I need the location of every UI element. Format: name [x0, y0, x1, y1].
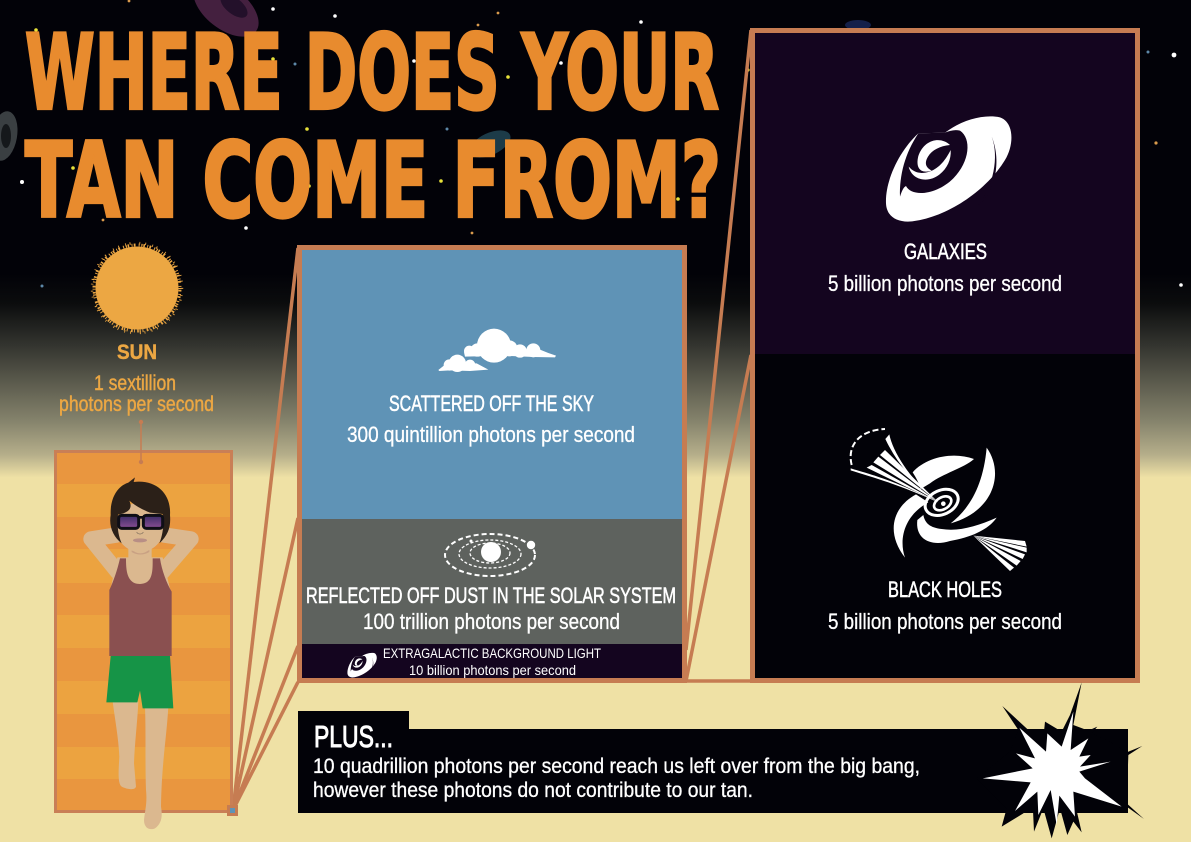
icon: clouds	[438, 329, 556, 372]
icon: black hole	[851, 429, 1027, 571]
connector lines: first panel to second panel	[686, 30, 751, 681]
icon: solar system	[445, 534, 535, 576]
panel: first zoom (sky, solar system, extragalactic)	[299, 247, 685, 680]
panel: galaxies	[752, 30, 1138, 354]
callout heading: PLUS...	[314, 719, 393, 754]
sun label: SUN	[117, 341, 157, 364]
icon: sun	[92, 243, 182, 333]
panel: scattered off the sky	[299, 247, 685, 519]
callout text	[313, 755, 920, 802]
connector lines: towel corner to first panel	[233, 248, 298, 810]
panel: reflected off dust in the solar system	[299, 519, 685, 644]
black holes heading and value	[828, 577, 1062, 634]
solar system heading and value: 100 trillion photons per second	[363, 609, 620, 634]
icon: galaxy	[886, 116, 1011, 222]
black holes heading and value: BLACK HOLES	[888, 577, 1002, 602]
title: TAN COME FROM?	[25, 122, 721, 242]
sky heading and value: SCATTERED OFF THE SKY	[389, 391, 594, 416]
panel: second zoom (galaxies and black holes)	[752, 30, 1138, 680]
extragalactic heading and value	[383, 645, 601, 678]
callout text: however these photons do not contribute to our tan.	[313, 779, 753, 802]
faint background galaxies	[0, 0, 871, 163]
panel: extragalactic background light	[299, 644, 685, 678]
galaxies heading and value: 5 billion photons per second	[828, 271, 1062, 296]
extragalactic heading and value: 10 billion photons per second	[409, 662, 576, 678]
extragalactic heading and value: EXTRAGALACTIC BACKGROUND LIGHT	[383, 645, 601, 661]
black holes heading and value: 5 billion photons per second	[828, 609, 1062, 634]
background stars	[20, 0, 1183, 287]
solar system heading and value: REFLECTED OFF DUST IN THE SOLAR SYSTEM	[306, 583, 676, 608]
icon: big bang burst	[977, 682, 1144, 838]
towel	[54, 450, 238, 816]
title: WHERE DOES YOUR	[25, 14, 719, 134]
galaxies heading and value	[828, 239, 1062, 296]
pointer from sun to person	[139, 420, 143, 464]
sky heading and value	[347, 391, 635, 447]
panel: plus big bang callout	[298, 682, 1144, 838]
galaxies heading and value: GALAXIES	[904, 239, 987, 264]
sun label: 1 sextillion	[94, 372, 176, 395]
sun label	[59, 341, 214, 416]
callout text: 10 quadrillion photons per second reach us left over from the big bang,	[313, 755, 920, 778]
solar system heading and value	[306, 583, 676, 634]
icon: small galaxy	[347, 653, 377, 677]
panel: black holes	[752, 354, 1138, 680]
person sunbathing	[91, 477, 191, 829]
title	[25, 14, 721, 242]
sun label: photons per second	[59, 393, 214, 416]
sky heading and value: 300 quintillion photons per second	[347, 422, 635, 447]
